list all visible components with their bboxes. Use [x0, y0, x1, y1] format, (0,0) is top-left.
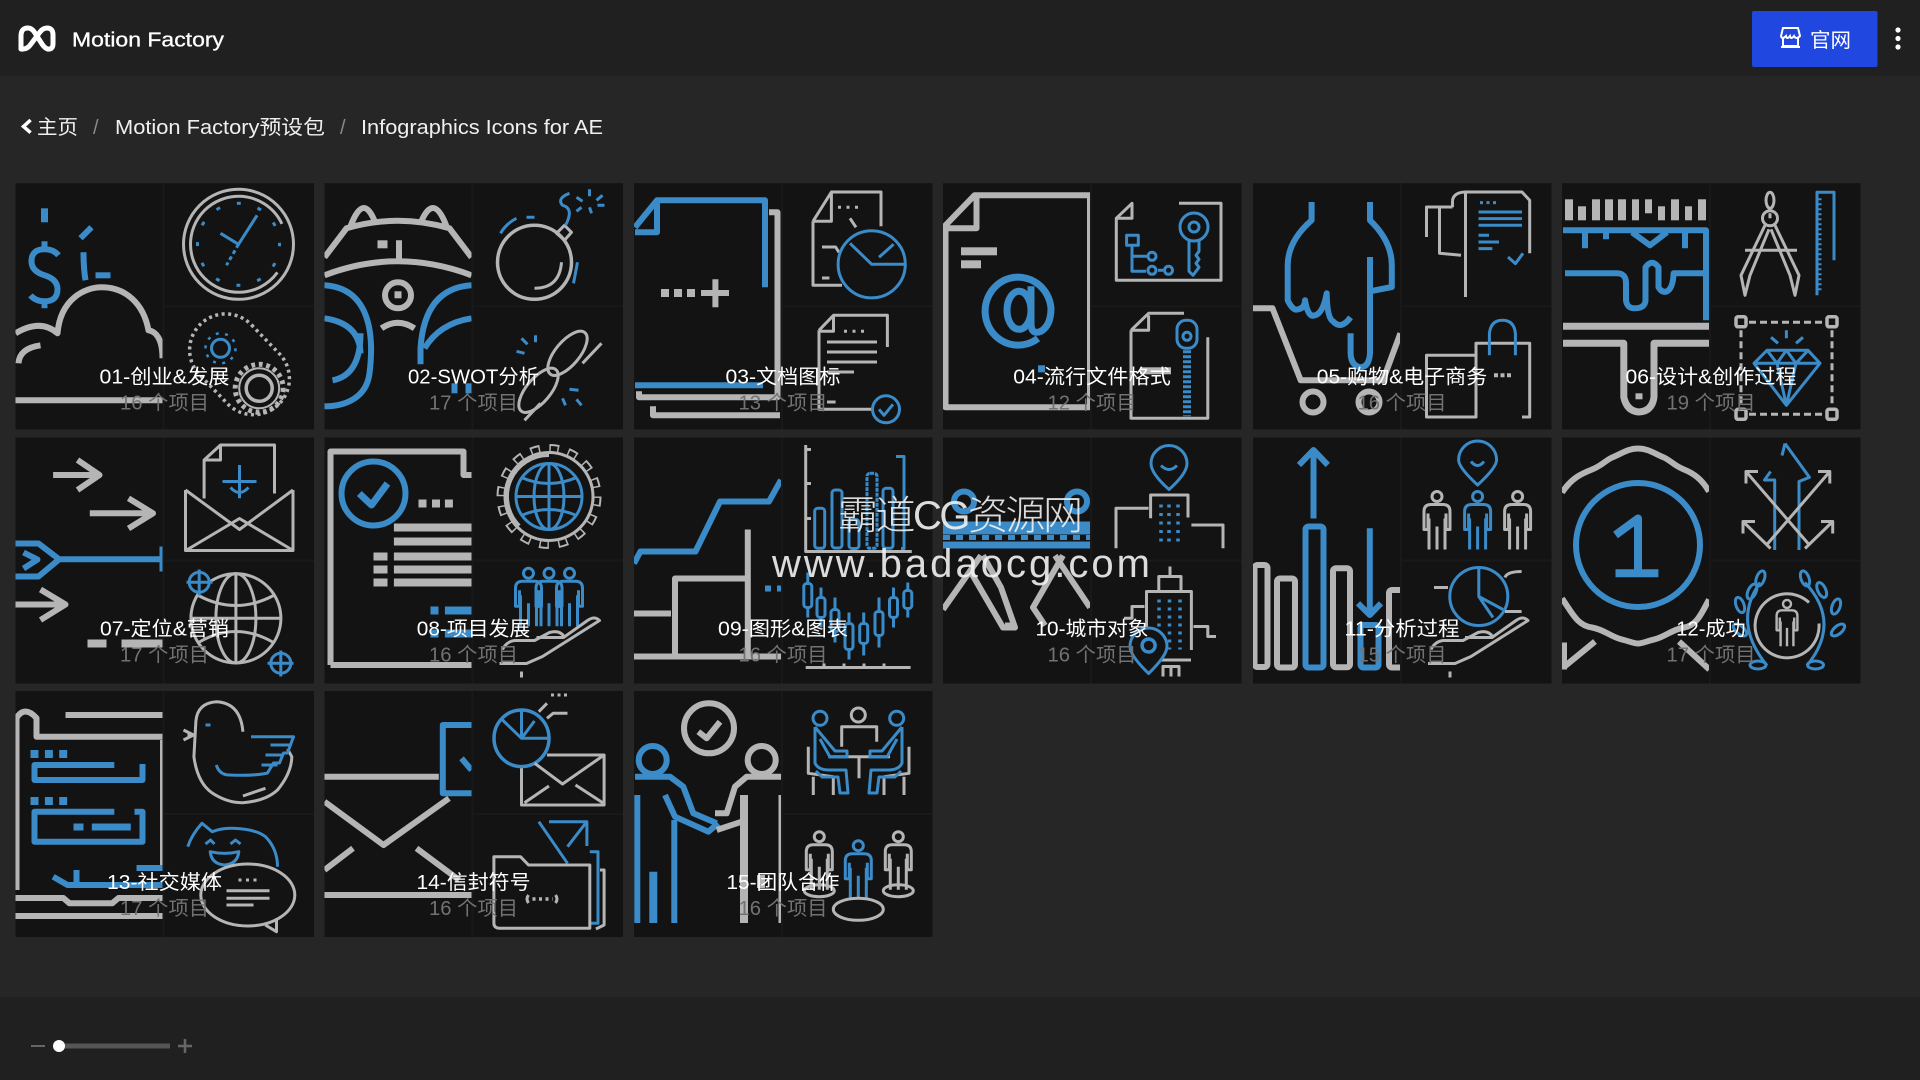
card 04: [943, 183, 1242, 429]
icon: bar chart: [806, 445, 912, 552]
item count: 16 个项目: [429, 897, 518, 920]
item count: 16 个项目: [1358, 391, 1446, 414]
card 02: [324, 183, 623, 429]
card title: 04-流行文件格式: [1013, 365, 1171, 388]
breadcrumb: Motion Factory预设包: [115, 116, 325, 139]
icon: globe and targets: [186, 570, 294, 676]
icon: cloud and money: [16, 208, 162, 400]
slider thumb: [53, 1040, 65, 1052]
card 09: [634, 438, 932, 684]
card 07: [16, 438, 314, 684]
card title: 11-分析过程: [1344, 618, 1460, 640]
icon: rising line and steps: [634, 480, 781, 656]
icon: envelope: [324, 725, 472, 895]
icon: skyscraper and map pin: [1124, 566, 1216, 676]
card 12: [1562, 438, 1860, 684]
slider minus: [31, 1045, 45, 1047]
item count: 16 个项目: [120, 391, 209, 414]
item count: 16 个项目: [429, 644, 518, 666]
icon: crossing arrows: [1743, 444, 1833, 550]
icon: bomb: [498, 189, 604, 299]
icon: handshake: [635, 703, 782, 923]
item count: 17 个项目: [1666, 644, 1756, 666]
card title: 07-定位&营销: [100, 618, 229, 640]
logo icon: [21, 28, 53, 49]
slider track: [59, 1044, 170, 1048]
icon: chat window: [16, 712, 162, 916]
icon: paint brush: [1563, 199, 1709, 412]
card title: 15-团队合作: [726, 871, 840, 894]
icon: number one medal: [1562, 448, 1709, 670]
card title: 03-文档图标: [726, 365, 840, 388]
icon: meeting table: [808, 708, 909, 795]
card 08: [324, 438, 623, 684]
card 11: [1253, 438, 1552, 684]
icon: city object: [943, 492, 1090, 628]
icon: target audience: [1424, 441, 1531, 550]
watermark: www.badaocg.com: [771, 542, 1150, 586]
breadcrumb: 主页: [37, 116, 78, 139]
card 10: [943, 438, 1242, 684]
icon: analysis bar chart: [1254, 450, 1419, 668]
item count: 12 个项目: [1048, 391, 1136, 414]
official site button: [1752, 11, 1878, 67]
breadcrumb: Infographics Icons for AE: [361, 117, 603, 139]
icon: gears: [175, 299, 304, 430]
icon: pie chart in hand: [1428, 568, 1528, 678]
icon: project checklist document: [330, 452, 472, 665]
item count: 19 个项目: [1666, 391, 1756, 414]
card title: 10-城市对象: [1036, 618, 1148, 640]
icon: document with at sign: [945, 195, 1090, 407]
card 15: [634, 691, 932, 937]
icon: document with pie chart: [813, 192, 905, 298]
item count: 16 个项目: [738, 897, 828, 920]
card title: 02-SWOT分析: [408, 365, 539, 388]
brand name: Motion Factory: [72, 30, 224, 52]
item count: 13 个项目: [738, 391, 828, 414]
item count: 17 个项目: [429, 391, 518, 414]
icon: design diamond: [1736, 317, 1837, 419]
breadcrumb: [24, 116, 603, 139]
card title: 12-成功: [1676, 618, 1746, 640]
icon: bird: [184, 702, 294, 803]
icon: folder: [494, 822, 604, 929]
card 13: [16, 691, 314, 937]
card 03: [634, 183, 932, 429]
card 06: [1562, 183, 1860, 429]
icon: team in hand: [500, 568, 600, 678]
icon: document stack: [635, 200, 780, 415]
card 14: [324, 691, 623, 937]
slider plus: [178, 1039, 192, 1053]
icon: shopping bags: [1426, 320, 1530, 417]
card 05: [1253, 183, 1552, 429]
icon: swot head: [324, 208, 472, 406]
item count: 17 个项目: [120, 644, 209, 666]
card title: 05-购物&电子商务: [1317, 365, 1487, 388]
icon: laurel and person: [1731, 570, 1847, 669]
icon: pin and building: [1116, 446, 1223, 548]
more menu dots: [1895, 27, 1901, 50]
icon: broken chain: [512, 325, 602, 420]
item count: 17 个项目: [120, 897, 209, 920]
breadcrumb: /: [93, 117, 99, 139]
item count: 15 个项目: [1358, 644, 1446, 666]
icon: candlestick chart: [804, 572, 912, 668]
icon: file with key and tree: [1116, 203, 1221, 280]
top header bar: [0, 0, 1920, 76]
icon: envelope: [186, 445, 293, 550]
card title: 08-项目发展: [417, 618, 530, 640]
icon: gear globe: [501, 448, 597, 544]
watermark: 霸道CG资源网: [838, 494, 1083, 538]
card title: 01-创业&发展: [100, 365, 230, 388]
watermark: [771, 494, 1150, 586]
breadcrumb: /: [340, 117, 346, 139]
icon: zip file: [1131, 313, 1208, 418]
item count: 16 个项目: [738, 644, 828, 666]
icon: speech bubbles: [188, 823, 295, 932]
item count: 16 个项目: [1048, 644, 1136, 666]
card 01: [16, 183, 314, 430]
card title: 06-设计&创作过程: [1626, 365, 1796, 388]
footer bar with zoom slider: [0, 997, 1920, 1080]
icon: hand and shopping cart: [1253, 202, 1400, 412]
card title: 14-信封符号: [416, 871, 530, 894]
icon: bill document: [1426, 192, 1530, 297]
icon: document with check: [819, 315, 900, 423]
icon: arrows: [16, 460, 162, 648]
card title: 09-图形&图表: [718, 618, 848, 640]
official site button: 官网: [1810, 29, 1851, 52]
card title: 13-社交媒体: [107, 871, 222, 894]
icon: compass and ruler: [1741, 192, 1834, 295]
icon: pie chart and mail: [494, 695, 604, 805]
icon: clock: [184, 189, 294, 299]
icon: team on podiums: [804, 832, 913, 920]
